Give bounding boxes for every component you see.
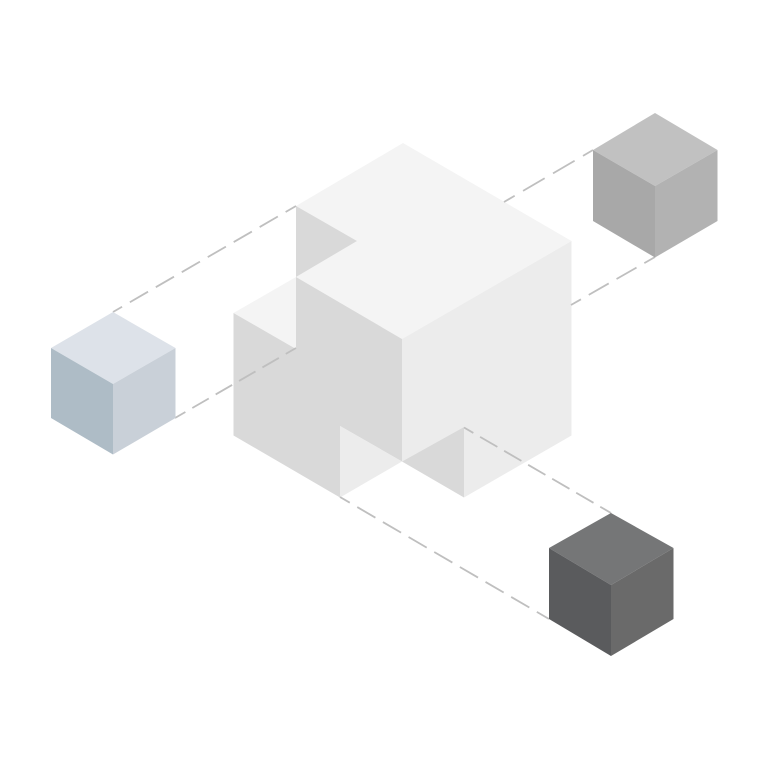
small cube: dark grey bottom — [549, 513, 674, 656]
small cube: blue-grey left — [51, 312, 176, 454]
dashed connector: left cube side to large cube — [175, 348, 296, 418]
dashed connector: right cube bottom to large cube — [571, 257, 655, 305]
dashed connector: bottom cube top to large cube — [464, 428, 611, 513]
large cube: left face — [234, 277, 402, 498]
large cube: upper notch shadow — [296, 206, 357, 277]
dashed connector: right cube top to large cube — [504, 150, 593, 202]
large cube: top face — [296, 143, 572, 339]
dashed connector: bottom cube side to large cube — [340, 497, 549, 619]
small cube: light grey right — [593, 113, 718, 258]
large cube: lower left notch — [340, 426, 402, 498]
large cube: right face — [402, 241, 572, 498]
large central cube with notches — [234, 143, 572, 498]
large cube: lower right notch — [402, 427, 464, 498]
large cube: small step top face — [234, 277, 296, 349]
dashed connector: left cube top to large cube — [113, 206, 296, 312]
